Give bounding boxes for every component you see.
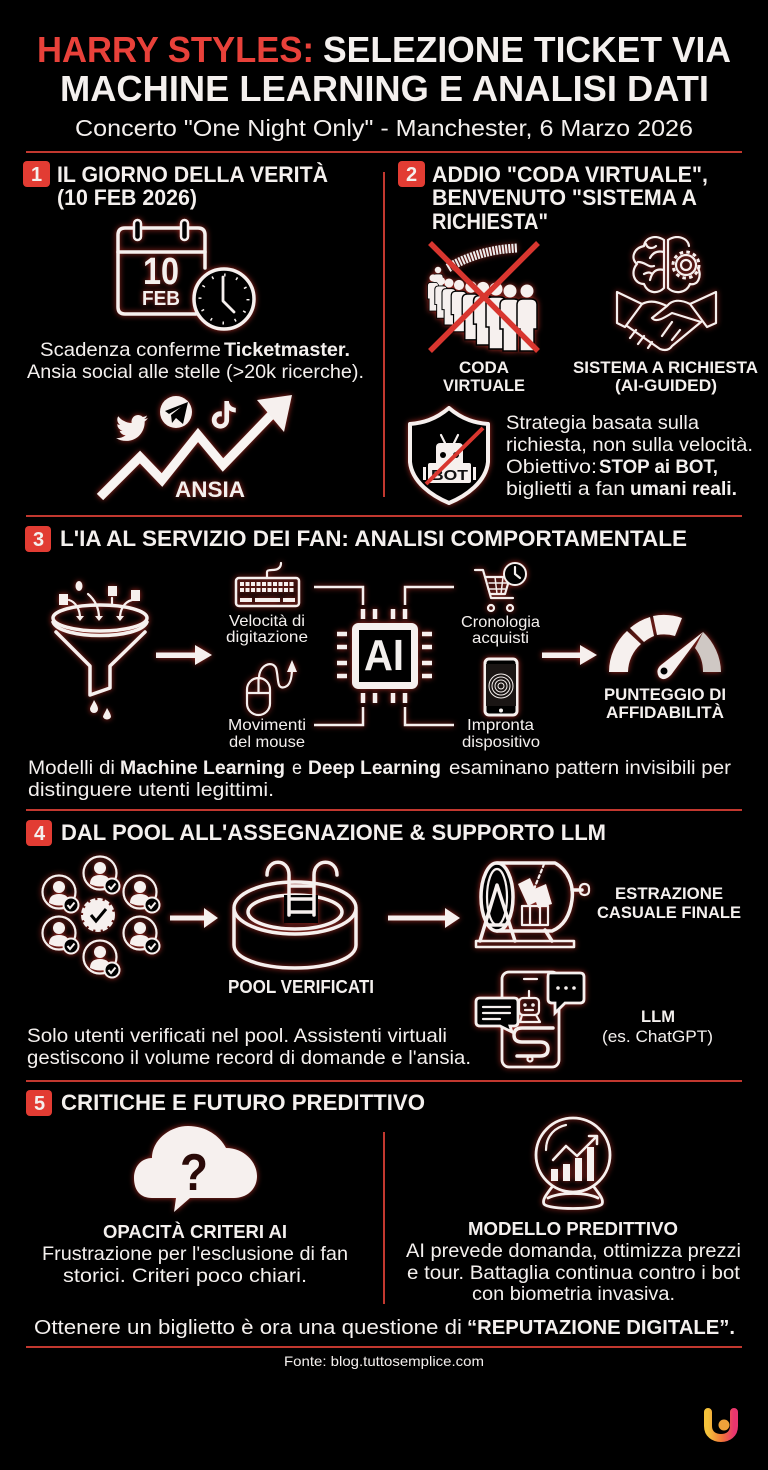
icon: brain and handshake: [617, 237, 716, 350]
chart: connector lines: [314, 587, 454, 725]
label: reliability score: PUNTEGGIO DI: [604, 685, 726, 704]
text: bot strategy: STOP ai BOT,: [599, 456, 718, 478]
heading: section 2: ADDIO "CODA VIRTUALE",: [432, 162, 708, 187]
heading: section 1: IL GIORNO DELLA VERITÀ: [57, 162, 328, 187]
title: SELEZIONE TICKET VIA: [323, 29, 731, 70]
text: pool note: [27, 1025, 471, 1069]
text: predictive model: AI prevede domanda, ottimizza prezzi: [406, 1240, 741, 1262]
text: machine learning note: e: [292, 757, 302, 779]
icon: gauge: [609, 615, 721, 679]
icon: calendar with clock: [118, 220, 254, 329]
label: sistema a richiesta: [573, 358, 758, 395]
icon: pool: [234, 862, 356, 968]
title: [37, 29, 731, 109]
text: opacity of AI criteria: OPACITÀ CRITERI AI: [103, 1221, 287, 1242]
label: sistema a richiesta: SISTEMA A RICHIESTA: [573, 358, 758, 377]
text: machine learning note: Machine Learning: [120, 757, 285, 779]
label: final random draw: ESTRAZIONE: [615, 884, 723, 903]
arrow: pool to draw: [388, 908, 460, 928]
label: typing speed: digitazione: [226, 629, 308, 646]
text: machine learning note: distinguere utenti legittimi.: [28, 779, 274, 801]
icon: social anxiety trend: ANSIA: [175, 477, 245, 502]
text: ticketmaster deadline: Scadenza conferme: [40, 339, 221, 361]
icon: shopping cart with clock: [475, 563, 526, 611]
heading: section 3: L'IA AL SERVIZIO DEI FAN: ANALISI COMPORTAMENTALE: [60, 526, 687, 551]
text: ticketmaster deadline: [27, 339, 364, 383]
text: bot strategy: Obiettivo:: [506, 456, 597, 478]
text: bot strategy: umani reali.: [630, 478, 737, 500]
source: Fonte: blog.tuttosemplice.com: [284, 1353, 484, 1369]
heading: section 5: CRITICHE E FUTURO PREDITTIVO: [61, 1090, 425, 1115]
icon: shield stop bot: BOT: [431, 467, 468, 484]
label: final random draw: CASUALE FINALE: [597, 903, 741, 922]
text: bot strategy: Strategia basata sulla: [506, 412, 699, 434]
icon: mouse: [247, 660, 297, 715]
heading: section 3: 3: [33, 529, 44, 551]
text: opacity of AI criteria: [42, 1221, 348, 1287]
title: MACHINE LEARNING E ANALISI DATI: [60, 68, 709, 109]
icon: cloud question mark: [134, 1126, 257, 1212]
label: mouse movements: [228, 717, 306, 751]
heading: section 2: [398, 161, 708, 234]
label: LLM: [602, 1007, 713, 1046]
panel: section 4: [26, 820, 741, 1069]
heading: section 5: 5: [34, 1093, 45, 1115]
icon: cloud question mark: ?: [180, 1144, 208, 1202]
text: opacity of AI criteria: Frustrazione per l'esclusione di fan: [42, 1243, 348, 1265]
text: predictive model: con biometria invasiva.: [472, 1283, 675, 1305]
label: mouse movements: Movimenti: [228, 717, 306, 734]
text: pool note: Solo utenti verificati nel pool. Assistenti virtuali: [27, 1025, 447, 1047]
text: pool note: gestiscono il volume record di domande e l'ansia.: [27, 1047, 471, 1069]
text: predictive model: e tour. Battaglia continua contro i bot: [407, 1262, 741, 1284]
text: machine learning note: Deep Learning: [308, 757, 441, 779]
icon: lottery drum: [476, 863, 589, 947]
label: mouse movements: del mouse: [229, 734, 305, 751]
heading: section 4: 4: [34, 823, 46, 845]
icon: calendar with clock: 10: [143, 251, 179, 293]
icon: phone fingerprint: [485, 659, 517, 715]
label: typing speed: [226, 613, 308, 646]
subtitle: Concerto "One Night Only" - Manchester, 6 Marzo 2026: [75, 115, 693, 141]
label: LLM: LLM: [641, 1007, 675, 1026]
icon: AI chip: [337, 609, 432, 703]
text: opacity of AI criteria: storici. Criteri poco chiari.: [63, 1265, 307, 1287]
heading: section 2: BENVENUTO "SISTEMA A: [432, 185, 697, 210]
text: ticketmaster deadline: Ticketmaster.: [224, 339, 350, 361]
text: predictive model: MODELLO PREDITTIVO: [468, 1219, 678, 1239]
icon: social anxiety trend: [100, 395, 292, 502]
heading: section 2: RICHIESTA": [432, 209, 548, 234]
label: LLM: (es. ChatGPT): [602, 1027, 713, 1046]
arrow: users to pool: [170, 908, 218, 928]
arrow: funnel to inputs: [156, 645, 212, 665]
heading: section 1: [23, 161, 328, 210]
heading: section 2: 2: [406, 164, 417, 186]
icon: logo: [708, 1412, 734, 1438]
label: sistema a richiesta: (AI-GUIDED): [615, 376, 717, 395]
text: machine learning note: esaminano pattern invisibili per: [449, 757, 732, 779]
text: bot strategy: biglietti a fan: [506, 478, 625, 500]
icon: LLM phone chat: [476, 972, 584, 1067]
label: device fingerprint: dispositivo: [462, 734, 540, 751]
callout: digital reputation: [34, 1317, 735, 1339]
text: ticketmaster deadline: Ansia social alle stelle (>20k ricerche).: [27, 361, 364, 383]
label: coda virtuale: [443, 358, 525, 395]
label: device fingerprint: Impronta: [467, 717, 534, 734]
panel: section 1: [23, 161, 364, 502]
label: typing speed: Velocità di: [229, 613, 305, 630]
text: predictive model: [406, 1219, 741, 1305]
icon: crossed out queue: [428, 243, 538, 351]
label: device fingerprint: [462, 717, 540, 751]
icon: calendar with clock: FEB: [142, 288, 180, 310]
label: purchase history: acquisti: [472, 630, 529, 647]
panel: section 2: [398, 161, 758, 503]
icon: keyboard: [236, 563, 299, 606]
callout: digital reputation: Ottenere un biglietto è ora una questione di: [34, 1317, 462, 1339]
icon: shield stop bot: [410, 408, 488, 503]
label: reliability score: [604, 685, 726, 722]
heading: section 1: (10 FEB 2026): [57, 185, 197, 210]
label: coda virtuale: CODA: [459, 358, 509, 377]
arrow: inputs to score: [542, 645, 597, 665]
icon: crystal ball forecast: [536, 1118, 610, 1208]
label: purchase history: [461, 614, 540, 647]
text: bot strategy: [506, 412, 753, 500]
icon: verified users: [42, 856, 160, 978]
text: machine learning note: Modelli di: [28, 757, 115, 779]
label: coda virtuale: VIRTUALE: [443, 376, 525, 395]
panel: section 3: [25, 526, 732, 801]
label: verified pool: POOL VERIFICATI: [228, 977, 374, 997]
text: bot strategy: richiesta, non sulla velocità.: [506, 434, 753, 456]
callout: digital reputation: “REPUTAZIONE DIGITALE”.: [467, 1317, 735, 1339]
heading: section 4: DAL POOL ALL'ASSEGNAZIONE & SUPPORTO LLM: [61, 820, 606, 845]
label: purchase history: Cronologia: [461, 614, 540, 631]
icon: AI chip: AI: [364, 631, 404, 680]
icon: data funnel: [53, 581, 147, 719]
label: final random draw: [597, 884, 741, 922]
title: HARRY STYLES:: [37, 29, 314, 70]
text: machine learning note: [28, 757, 732, 801]
panel: section 5: [26, 1090, 741, 1305]
label: reliability score: AFFIDABILITÀ: [606, 703, 724, 722]
heading: section 1: 1: [31, 164, 42, 186]
